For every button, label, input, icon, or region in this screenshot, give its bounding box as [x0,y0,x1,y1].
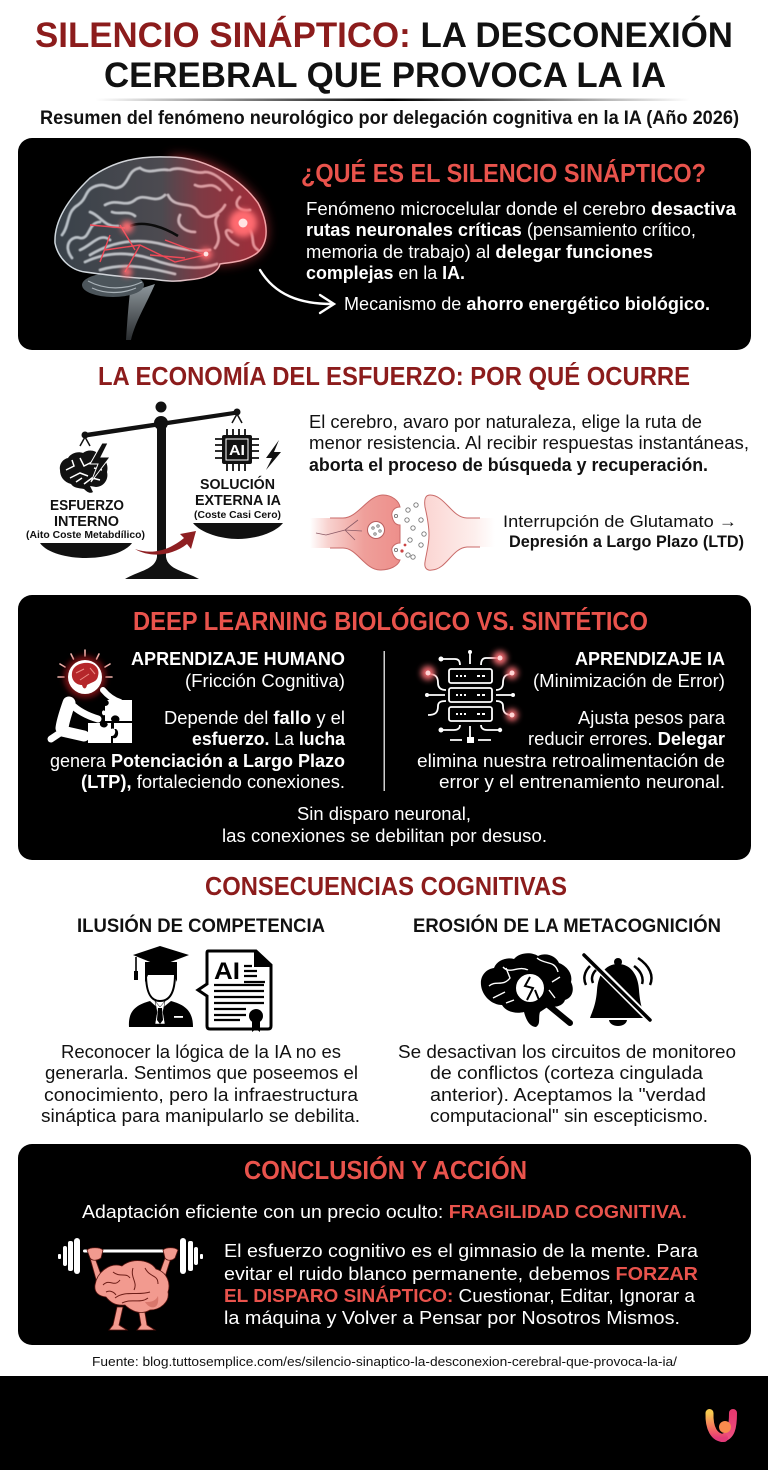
label: internal effort [26,498,145,541]
text block: illusion of competence: conocimiento, pero la infraestructura [44,1085,359,1105]
icon: graduate [129,946,193,1027]
heading: deep learning: DEEP LEARNING BIOLÓGICO VS. SINTÉTICO [133,606,648,636]
icon: AI chip: AI [229,443,245,459]
text block: human learning: Depende del fallo y el [164,708,345,728]
text block: definition: memoria de trabajo) al delegar funciones [306,242,653,262]
callout: no neural firing [222,804,547,846]
label: external AI solution: SOLUCIÓN [200,475,275,493]
icon: brain with lightning [60,443,110,493]
text block: definition: complejas en la IA. [306,263,465,283]
text block: human learning: (Fricción Cognitiva) [185,671,345,691]
text block: illusion of competence: sináptica para manipularlo se debilita. [41,1106,360,1126]
text block: metacognition erosion: computacional" sin escepticismo. [430,1106,708,1126]
text block: AI learning: reducir errores. Delegar [528,729,725,749]
text block: human learning: APRENDIZAJE HUMANO [131,649,345,669]
text block: definition: rutas neuronales críticas (pensamiento crítico, [306,220,696,240]
icon: synapse illustration [310,495,495,570]
text block: metacognition erosion: anterior). Aceptamos la "verdad [430,1085,706,1105]
text block: AI learning [417,649,726,792]
text block: metacognition erosion: Se desactivan los circuitos de monitoreo [398,1042,736,1062]
heading: conclusion: CONCLUSIÓN Y ACCIÓN [244,1155,527,1185]
text block: call to action: EL DISPARO SINÁPTICO: Cuestionar, Editar, Ignorar a [224,1285,696,1306]
label: glutamate interruption [503,512,744,551]
heading: economy of effort: LA ECONOMÍA DEL ESFUERZO: POR QUÉ OCURRE [98,361,690,391]
text block: illusion of competence [41,1042,360,1126]
icon: AI certificate document [198,950,272,1032]
label: internal effort: ESFUERZO [50,498,124,514]
left pan [40,543,132,558]
label: glutamate interruption: Interrupción de Glutamato → [503,512,737,531]
text block: call to action [224,1241,699,1328]
label: external AI solution: (Coste Casi Cero) [194,509,281,521]
label: external AI solution [194,475,282,521]
label: external AI solution: EXTERNA IA [195,493,282,509]
icon: server network [421,650,518,743]
label: internal effort: INTERNO [54,514,119,530]
icon: AI certificate document: AI [214,958,240,985]
heading: cognitive consequences: CONSECUENCIAS COGNITIVAS [205,871,567,901]
text block: definition: Fenómeno microcelular donde el cerebro desactiva [306,199,737,219]
text block: illusion of competence: generarla. Sentimos que poseemos el [45,1063,358,1083]
icon: AI chip [215,429,281,471]
text block: definition [306,199,737,283]
text block: call to action: la máquina y Volver a Pensar por Nosotros Mismos. [224,1308,680,1328]
subheading: illusion of competence: ILUSIÓN DE COMPETENCIA [77,915,325,937]
text block: why it happens [309,412,749,475]
icon: brain with magnifier [481,953,573,1027]
right pan [193,523,283,539]
icon: muted bell [584,955,652,1026]
title [35,15,733,95]
title: CEREBRAL QUE PROVOCA LA IA [104,56,666,95]
text block: AI learning: (Minimización de Error) [533,671,725,691]
text block: illusion of competence: Reconocer la lógica de la IA no es [61,1042,341,1062]
text block: AI learning: elimina nuestra retroalimentación de [417,751,725,771]
subtitle: Resumen del fenómeno neurológico por delegación cognitiva en la IA (Año 2026) [40,108,739,129]
text block: human learning: (LTP), fortaleciendo conexiones. [81,772,345,792]
footer band [0,1376,768,1470]
text block: hidden price: Adaptación eficiente con un precio oculto: FRAGILIDAD COGNITIVA. [82,1202,687,1222]
icon: person solving puzzle [51,650,132,743]
text block: AI learning: error y el entrenamiento neuronal. [439,772,725,792]
text block: why it happens: El cerebro, avaro por naturaleza, elige la ruta de [309,412,702,432]
source line: Fuente: blog.tuttosemplice.com/es/silencio-sinaptico-la-desconexion-cerebral-que-provoca-la-ia/ [92,1354,677,1369]
label: glutamate interruption: Depresión a Largo Plazo (LTD) [509,532,744,551]
text block: human learning: genera Potenciación a Largo Plazo [50,751,345,771]
title: SILENCIO SINÁPTICO: LA DESCONEXIÓN [35,15,733,55]
text block: why it happens: menor resistencia. Al recibir respuestas instantáneas, [309,433,749,453]
text block: AI learning: APRENDIZAJE IA [575,649,725,669]
callout: no neural firing: Sin disparo neuronal, [297,804,471,824]
label: internal effort: (Aito Coste Metabdílico) [26,529,145,541]
panel: what is synaptic silence [18,138,751,350]
text block: call to action: evitar el ruido blanco permanente, debemos FORZAR [224,1264,698,1284]
subheading: metacognition erosion: EROSIÓN DE LA METACOGNICIÓN [413,915,721,937]
text block: call to action: El esfuerzo cognitivo es el gimnasio de la mente. Para [224,1241,699,1261]
heading: what is it: ¿QUÉ ES EL SILENCIO SINÁPTICO? [301,158,706,188]
panel: biological vs synthetic deep learning [18,595,751,860]
text block: metacognition erosion: de conflictos (corteza cingulada [430,1063,704,1083]
icon: brain lifting barbell [58,1238,203,1330]
icon: logo [709,1413,733,1438]
arrow: shift to AI [135,531,196,555]
panel: conclusion and action [18,1144,751,1345]
text block: metacognition erosion [398,1042,736,1126]
arrow: brain to mechanism [260,270,334,313]
text block: why it happens: aborta el proceso de búsqueda y recuperación. [309,455,708,475]
text block: human learning [50,649,346,792]
callout: energy saving: Mecanismo de ahorro energético biológico. [344,294,710,314]
callout: no neural firing: las conexiones se debilitan por desuso. [222,826,547,846]
icon: glowing brain [55,157,266,340]
text block: human learning: esfuerzo. La lucha [192,729,346,749]
icon: balance scale [26,402,283,579]
text block: AI learning: Ajusta pesos para [578,708,726,728]
